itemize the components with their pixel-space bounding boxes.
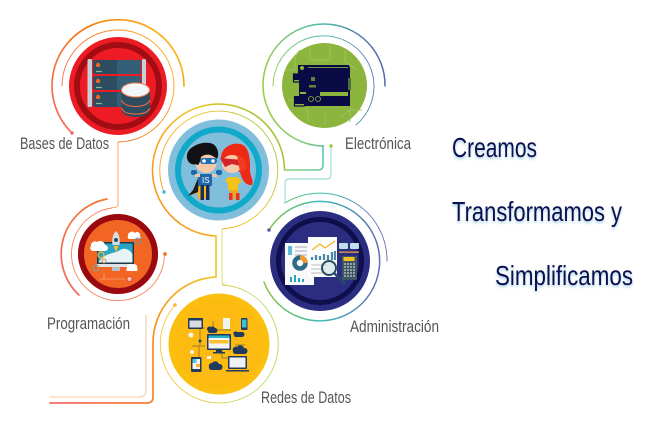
icon: connected devices <box>188 318 249 372</box>
text: Simplificamos: Simplificamos <box>495 260 633 291</box>
icon: server rack and database <box>88 59 150 117</box>
text: Transformamos y: Transformamos y <box>452 196 622 227</box>
heading: slogan <box>452 132 633 291</box>
badge circle <box>69 37 167 135</box>
badge circle <box>78 214 158 294</box>
icon: boy superhero: IS <box>202 176 210 185</box>
panel: Administración <box>270 211 439 336</box>
panel: Bases de Datos <box>20 37 167 153</box>
icon: monitor with rocket <box>90 231 141 282</box>
badge circle <box>168 120 269 220</box>
text: Creamos: Creamos <box>452 132 537 163</box>
connector lines and orbit arcs <box>50 20 387 403</box>
badge circle <box>168 294 270 394</box>
label: Electrónica <box>345 135 412 153</box>
label: Programación <box>47 315 130 333</box>
panel: Redes de Datos <box>168 294 351 407</box>
icon: girl superhero <box>220 144 253 200</box>
panel: central heroes <box>168 120 269 220</box>
icon: reports and calculator <box>285 237 359 285</box>
panel: Electrónica <box>282 43 412 153</box>
panel: Programación <box>47 214 158 333</box>
icon: circuit board <box>293 65 351 106</box>
badge circle <box>282 43 367 128</box>
label: Administración <box>350 318 439 336</box>
label: Bases de Datos <box>20 135 109 153</box>
badge circle <box>270 211 370 311</box>
label: Redes de Datos <box>261 389 351 407</box>
